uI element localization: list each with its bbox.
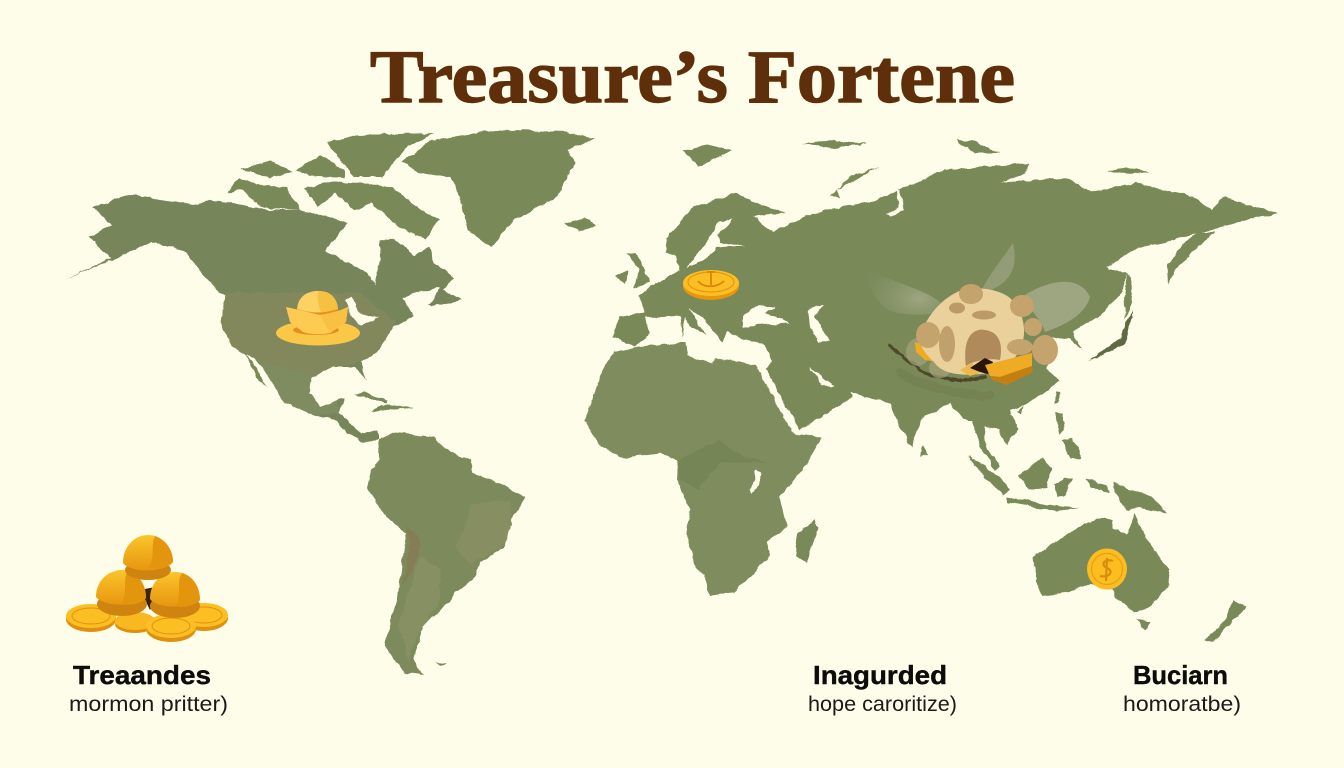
Novaya Zemlya: [830, 167, 879, 198]
Java and lesser islands: [1007, 497, 1080, 511]
shade: [176, 573, 200, 607]
Luzon: [1055, 412, 1065, 435]
title: Treasure’s Fortene: [370, 36, 1015, 119]
edge: [146, 616, 196, 642]
edge: [180, 605, 228, 631]
top wing: [980, 243, 1015, 295]
cap: [123, 535, 173, 570]
Baffin Island: [305, 182, 439, 240]
left dome: [96, 570, 147, 616]
translucent rock lower left: [906, 338, 930, 366]
Black Sea: [743, 305, 790, 328]
Tasmania: [1138, 620, 1150, 630]
Great Britain: [627, 252, 651, 288]
ring: [72, 608, 110, 624]
label: left subtext: mormon pritter): [69, 693, 228, 716]
Sakhalin: [1124, 273, 1132, 320]
Patagonia shading: [398, 555, 440, 660]
Andes shading: [402, 525, 420, 590]
Eurasia: [613, 163, 1278, 470]
cap: [150, 572, 200, 607]
coin face: [683, 270, 739, 296]
bar top: [985, 353, 1032, 377]
face: [146, 614, 196, 638]
Lake Victoria: [749, 468, 761, 494]
Franz Josef Land: [801, 141, 868, 148]
New Siberian Islands: [1107, 168, 1149, 175]
coin glyph: [698, 271, 724, 286]
Japan: [1087, 310, 1133, 362]
label: middle heading: Inagurded: [813, 660, 947, 690]
New Guinea: [1112, 483, 1167, 513]
icon: gold coin Australia: [1087, 548, 1127, 590]
Persian Gulf: [810, 367, 834, 387]
bar side: [990, 366, 1033, 385]
tan rock upper right: [1010, 295, 1034, 317]
shade: [148, 536, 173, 569]
New Zealand: [1205, 600, 1247, 642]
band: [97, 592, 147, 616]
Arctic islands east: [296, 155, 345, 178]
Mindanao: [1062, 438, 1082, 460]
shade: [122, 571, 146, 605]
Arctic islands: [240, 160, 292, 178]
right dome: [150, 572, 200, 618]
middle shadow: [140, 585, 165, 610]
Baltic Sea: [687, 219, 745, 267]
coin right: [180, 603, 228, 631]
face: [180, 603, 228, 627]
Himalaya ridge: [890, 345, 990, 395]
Taiwan: [1055, 392, 1060, 403]
Iceland: [564, 218, 596, 232]
icon: pile of gold coins: [66, 535, 228, 642]
ingot dome: [297, 291, 338, 315]
South America: [367, 432, 525, 675]
icon: treasure mound with gold bar: [906, 284, 1058, 385]
USA lighter region: [221, 293, 395, 377]
right wing: [1020, 282, 1090, 332]
Borneo: [1018, 458, 1052, 490]
tan panel: [939, 326, 955, 362]
face: [115, 612, 155, 630]
dome shadow line: [297, 310, 338, 314]
tan spot 1: [949, 302, 965, 314]
coin inner ring: [1092, 554, 1122, 584]
tan rock left: [916, 322, 940, 348]
Cuba: [354, 391, 387, 404]
translucent wings behind mound: [860, 243, 1090, 332]
coin front: [146, 614, 196, 642]
Congo shading: [678, 440, 768, 490]
face: [66, 604, 116, 628]
cream mound: [920, 288, 1024, 375]
label: middle subtext: hope caroritize): [808, 693, 957, 716]
label: left heading: Treaandes: [73, 660, 211, 690]
band: [125, 560, 171, 580]
label: right subtext: homoratbe): [1123, 693, 1241, 716]
coin edge: [683, 272, 739, 300]
coin disc: [1087, 548, 1127, 590]
Caspian Sea: [808, 305, 830, 342]
Africa: [585, 342, 822, 595]
Great Lakes: [345, 297, 378, 325]
cave opening: [970, 358, 993, 374]
gold bar: [985, 353, 1033, 385]
ring: [152, 618, 190, 634]
cave arch: [965, 330, 1001, 366]
Australia: [1033, 513, 1170, 613]
coin left: [66, 604, 116, 632]
Greenland: [402, 130, 596, 247]
Victoria and Banks Islands: [227, 178, 300, 210]
tan rock right upper: [1024, 318, 1042, 336]
edge: [115, 615, 155, 633]
edge: [66, 606, 116, 632]
dome shade: [318, 291, 338, 314]
Gulf of St Lawrence: [403, 288, 440, 312]
world map: [64, 130, 1278, 675]
cap: [96, 570, 146, 605]
Hainan: [1016, 406, 1023, 414]
ingot right facet: [320, 307, 348, 333]
ring: [186, 607, 222, 623]
Hispaniola: [370, 404, 414, 412]
Sulawesi: [1054, 478, 1073, 497]
Sumatra: [968, 456, 1010, 495]
gold nuggets left: [915, 342, 943, 363]
ingot body: [286, 307, 348, 334]
Falkland Islands: [437, 662, 447, 666]
ingot shadow: [293, 325, 339, 335]
Madagascar: [795, 520, 818, 563]
Moluccas: [1085, 478, 1110, 492]
left wing: [860, 260, 945, 315]
Baja California: [245, 355, 266, 387]
coin ring: [688, 272, 734, 292]
Ob Gulf: [886, 190, 904, 217]
Ellesmere Island: [327, 133, 434, 177]
icon: gold ingot: [276, 291, 360, 346]
top dome: [123, 535, 173, 580]
tan rock far right: [1032, 335, 1058, 365]
Svalbard: [683, 145, 732, 167]
Brazil highland shading: [455, 500, 512, 565]
Severnaya Zemlya: [955, 140, 1000, 153]
translucent rock bottom: [929, 358, 951, 378]
icon: gold coin Europe: [683, 270, 739, 300]
tan rock right middle: [1007, 339, 1033, 355]
Sri Lanka: [920, 445, 927, 456]
coin back middle: [115, 612, 155, 633]
tan spot 2: [972, 310, 996, 320]
label: right heading: Buciarn: [1133, 660, 1228, 690]
tan rock top: [959, 284, 983, 304]
ingot base: [276, 320, 360, 346]
Mexico region: [254, 358, 339, 415]
Ireland: [616, 270, 627, 285]
North America: [64, 195, 462, 442]
gold nugget bottom: [960, 363, 980, 376]
Kamchatka: [1167, 232, 1215, 285]
band: [150, 594, 200, 618]
dollar glyph: [1100, 558, 1113, 581]
